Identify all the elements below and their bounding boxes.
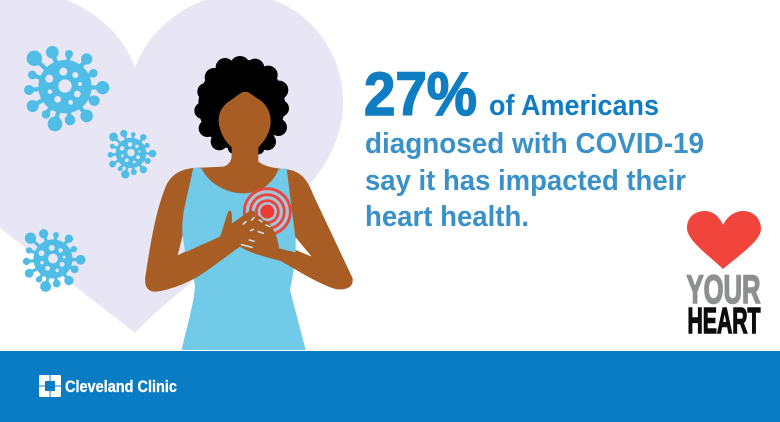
target rings (244, 189, 290, 235)
finger gaps (242, 218, 270, 247)
icon: large virus (24, 46, 109, 131)
body text: heart health. (365, 201, 529, 233)
logo mark (39, 375, 61, 397)
body text (365, 128, 704, 233)
hair (194, 56, 289, 154)
headline: of Americans: of Americans (489, 90, 659, 122)
figure: woman holding her chest (145, 56, 353, 350)
icon: red heart (687, 211, 761, 269)
icon: medium virus (23, 229, 86, 292)
footer band (0, 351, 780, 422)
logo wordmark: Cleveland Clinic (65, 377, 177, 396)
target disc over the heart (243, 188, 291, 236)
badge: love your heart (686, 211, 761, 341)
forearms and hands (153, 211, 343, 292)
body text: say it has impacted their (365, 165, 686, 197)
forearm gap left (178, 235, 185, 255)
body text: diagnosed with COVID-19 (365, 128, 704, 160)
headline: statistic (364, 60, 659, 128)
logo: Cleveland Clinic (39, 375, 177, 397)
forearm gap right (296, 237, 312, 257)
target centre (260, 205, 274, 219)
icon: small virus (108, 130, 156, 178)
headline: statistic: 27% (364, 60, 477, 128)
arms, neck and chest (145, 143, 353, 292)
face (219, 92, 271, 153)
dress (182, 168, 306, 350)
background heart (0, 0, 343, 333)
